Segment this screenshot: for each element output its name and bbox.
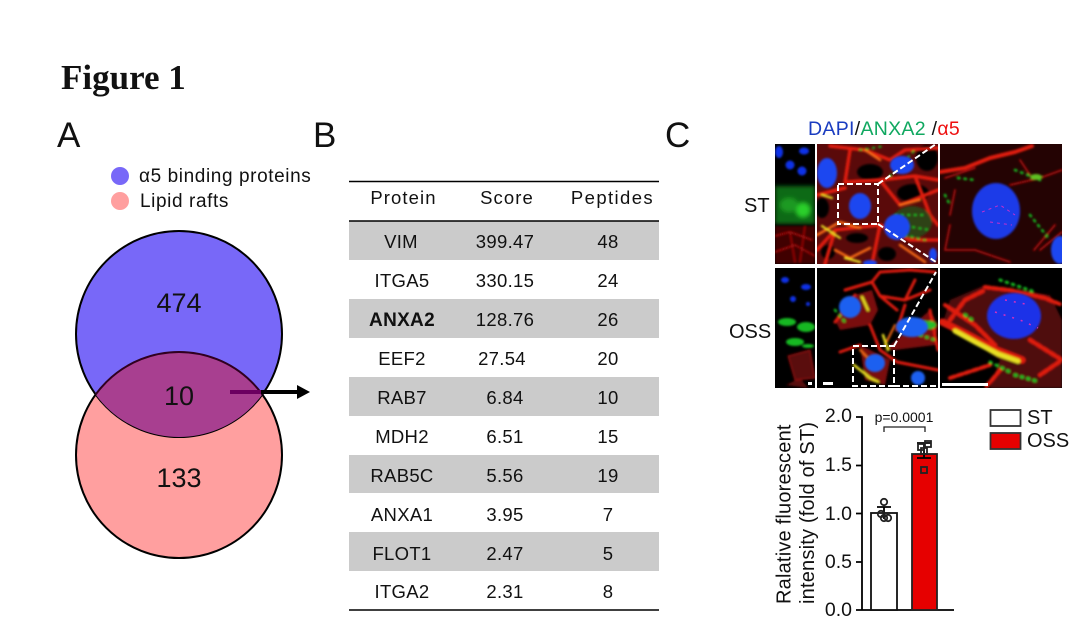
table header: Peptides [571,187,654,208]
table rows: ITGA5 [375,270,429,291]
table rows: 2.31 [486,581,524,602]
table rows: VIM [384,231,418,252]
table rows: ANXA2 [369,310,435,331]
image: OSS zoomed cell [940,268,1062,388]
count 10: 10 [164,381,194,411]
y axis: 0.0 [825,599,852,621]
y axis: 2.0 [825,405,852,427]
count 133: 133 [156,463,202,493]
table rows: 6.84 [486,387,524,408]
table rows: MDH2 [375,426,429,447]
table rows: RAB5C [370,465,434,486]
table rows: RAB7 [377,387,427,408]
circle: alpha5 binding proteins [76,231,282,437]
arrow to table [230,385,310,399]
table rows: ITGA2 [375,581,429,602]
legend [111,166,311,212]
table rows: 5 [603,543,613,564]
panel: Venn diagram [76,166,311,558]
table rows: 27.54 [478,348,526,369]
y axis [825,405,954,621]
y axis title: intensity (fold of ST) [797,422,819,604]
image: ST channels [775,144,815,264]
count 474: 474 [156,288,202,318]
bar: OSS [912,441,937,610]
y axis: 1.0 [825,503,852,525]
image: ST merged [815,144,938,266]
panel: confocal micrographs [729,118,1069,388]
table header [370,187,654,208]
table rows: 3.95 [486,504,524,525]
panel: protein table [349,182,659,610]
legend: Lipid rafts [140,191,229,212]
chart legend [990,407,1069,452]
table rows: 15 [597,426,619,447]
table rows: 7 [603,504,613,525]
table header: Protein [370,187,437,208]
image: OSS merged [817,268,938,388]
title: Figure 1 [61,58,186,97]
staining legend: DAPI/ANXA2 /α5 [808,118,960,140]
table rows: 10 [597,387,619,408]
table rows: ANXA1 [371,504,433,525]
overlap region [95,351,262,437]
panel label A: A [57,116,81,155]
table rows: 6.51 [486,426,524,447]
table rows: 24 [597,270,619,291]
bar: ST [871,499,897,610]
table rows: 5.56 [486,465,524,486]
panel: bar chart [774,405,1069,621]
y axis: 0.5 [825,551,852,573]
table rows: 330.15 [476,270,534,291]
circle: lipid rafts [76,352,282,558]
table rows: 8 [603,581,613,602]
legend: α5 binding proteins [139,166,311,187]
table rows: 20 [597,348,619,369]
significance bracket [875,409,934,432]
table rows: 2.47 [486,543,524,564]
row label OSS: OSS [729,321,771,343]
panel label C: C [665,116,690,155]
table rows: 399.47 [476,231,534,252]
image: ST zoomed cell [940,144,1069,264]
image: OSS channels [775,268,815,388]
table rows: 26 [597,309,619,330]
y axis title [774,422,819,604]
row label ST: ST [744,195,770,217]
chart legend: ST [1027,407,1053,429]
y axis: 1.5 [825,454,852,476]
panel label B: B [313,116,336,155]
table header: Score [480,187,534,208]
table rows: 19 [597,465,619,486]
table rows: 128.76 [476,309,534,330]
significance bracket: p=0.0001 [875,409,934,425]
table rows [369,231,619,602]
table rows: FLOT1 [372,543,432,564]
chart legend: OSS [1027,430,1069,452]
y axis title: Ralative fluorescent [774,424,796,604]
table rows: EEF2 [378,348,426,369]
table rows: 48 [597,231,619,252]
